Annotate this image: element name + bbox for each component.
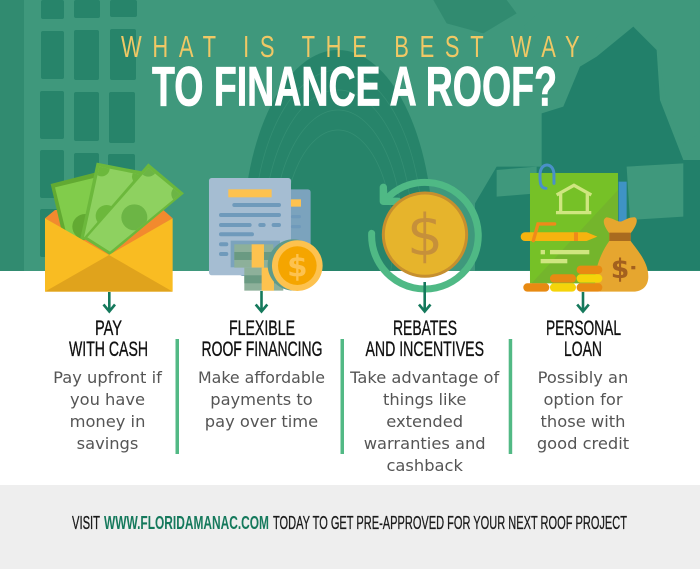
heading: LOAN	[564, 338, 602, 361]
body text: option for	[543, 390, 623, 409]
body text: those with	[541, 412, 625, 431]
heading	[366, 317, 484, 361]
body text	[349, 368, 501, 475]
arrow: loan	[577, 292, 589, 312]
body text	[198, 368, 325, 431]
footer call to action	[72, 513, 627, 533]
icon: rebate coin with circular arrow	[372, 182, 478, 289]
heading: PERSONAL	[546, 317, 621, 340]
footer call to action: VISIT	[72, 513, 100, 533]
body text	[537, 368, 629, 453]
body text: savings	[77, 434, 138, 453]
title	[121, 29, 580, 117]
body text: money in	[70, 412, 145, 431]
arrow: cash	[104, 292, 115, 312]
column: pay with cash	[53, 317, 163, 453]
heading: WITH CASH	[69, 338, 148, 361]
arrow: financing	[256, 291, 267, 312]
body text: you have	[70, 390, 145, 409]
body text: extended	[386, 412, 463, 431]
icon: personal loan document with money bag: $	[611, 254, 629, 285]
heading: AND INCENTIVES	[366, 338, 484, 361]
body text	[53, 368, 163, 453]
footer bar	[0, 485, 700, 569]
body text: payments to	[210, 390, 313, 409]
body text: warranties and	[364, 434, 486, 453]
icon: rebate coin with circular arrow: $	[407, 203, 443, 269]
heading: REBATES	[393, 317, 457, 340]
body text: Possibly an	[538, 368, 628, 387]
icon: envelope with cash	[45, 159, 189, 292]
title line 1: what is the best way: WHAT IS THE BEST WAY	[121, 29, 580, 64]
body text: good credit	[537, 434, 629, 453]
body text: Take advantage of	[349, 368, 501, 387]
body text: Pay upfront if	[53, 368, 163, 387]
icon: financing documents with coin: $	[287, 250, 308, 284]
heading: FLEXIBLE	[229, 317, 295, 340]
heading: PAY	[95, 317, 122, 340]
heading	[69, 317, 148, 361]
heading	[546, 317, 621, 361]
column: flexible roof financing	[198, 317, 325, 431]
body text: things like	[383, 390, 466, 409]
heading: ROOF FINANCING	[202, 338, 322, 361]
heading	[202, 317, 322, 361]
column: rebates and incentives	[349, 317, 501, 475]
icon: financing documents with coin	[209, 178, 323, 291]
panel: green photo header background	[0, 0, 700, 271]
column: personal loan	[537, 317, 629, 453]
body text: Make affordable	[198, 368, 325, 387]
body text: cashback	[386, 456, 463, 475]
body text: pay over time	[205, 412, 318, 431]
icon: personal loan document with money bag	[521, 165, 648, 292]
footer call to action: WWW.FLORIDAMANAC.COM	[104, 513, 269, 533]
arrow: rebates	[419, 282, 430, 312]
